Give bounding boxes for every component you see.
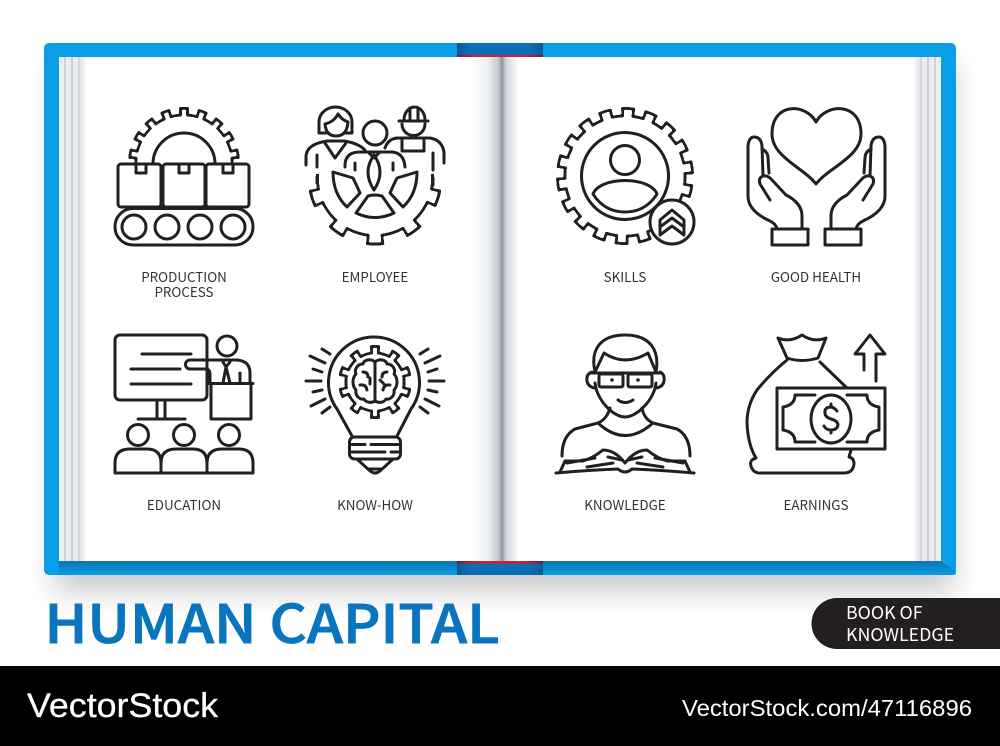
label: production process: PROCESS xyxy=(154,281,214,301)
icon: employee xyxy=(306,107,444,240)
label: knowledge: KNOWLEDGE xyxy=(584,494,666,514)
icon: skills xyxy=(561,112,694,244)
icon: education xyxy=(115,335,253,473)
badge: book of knowledge: BOOK OF xyxy=(846,599,923,625)
badge: book of knowledge: KNOWLEDGE xyxy=(846,621,954,647)
footer bar xyxy=(0,666,1000,746)
label: production process: PRODUCTION xyxy=(141,266,227,286)
icon: earnings xyxy=(747,335,885,473)
book cover and pages xyxy=(44,43,956,592)
footer bar: VectorStock.com/47116896 xyxy=(682,695,972,721)
label: earnings: EARNINGS xyxy=(783,494,849,514)
label: skills: SKILLS xyxy=(604,266,646,286)
icon: production process xyxy=(115,112,253,245)
footer bar: VectorStock xyxy=(27,687,219,725)
icon: good health xyxy=(748,109,885,245)
label: know-how: KNOW-HOW xyxy=(337,494,413,514)
spine band top xyxy=(457,43,543,57)
label: employee: EMPLOYEE xyxy=(342,266,408,286)
icon: know-how xyxy=(306,337,444,473)
icon: knowledge xyxy=(556,335,694,473)
label: education: EDUCATION xyxy=(147,494,221,514)
badge: book of knowledge xyxy=(812,598,1000,649)
title: HUMAN CAPITAL xyxy=(44,583,500,659)
label: good health: GOOD HEALTH xyxy=(771,266,861,286)
spine band bottom xyxy=(457,561,543,575)
